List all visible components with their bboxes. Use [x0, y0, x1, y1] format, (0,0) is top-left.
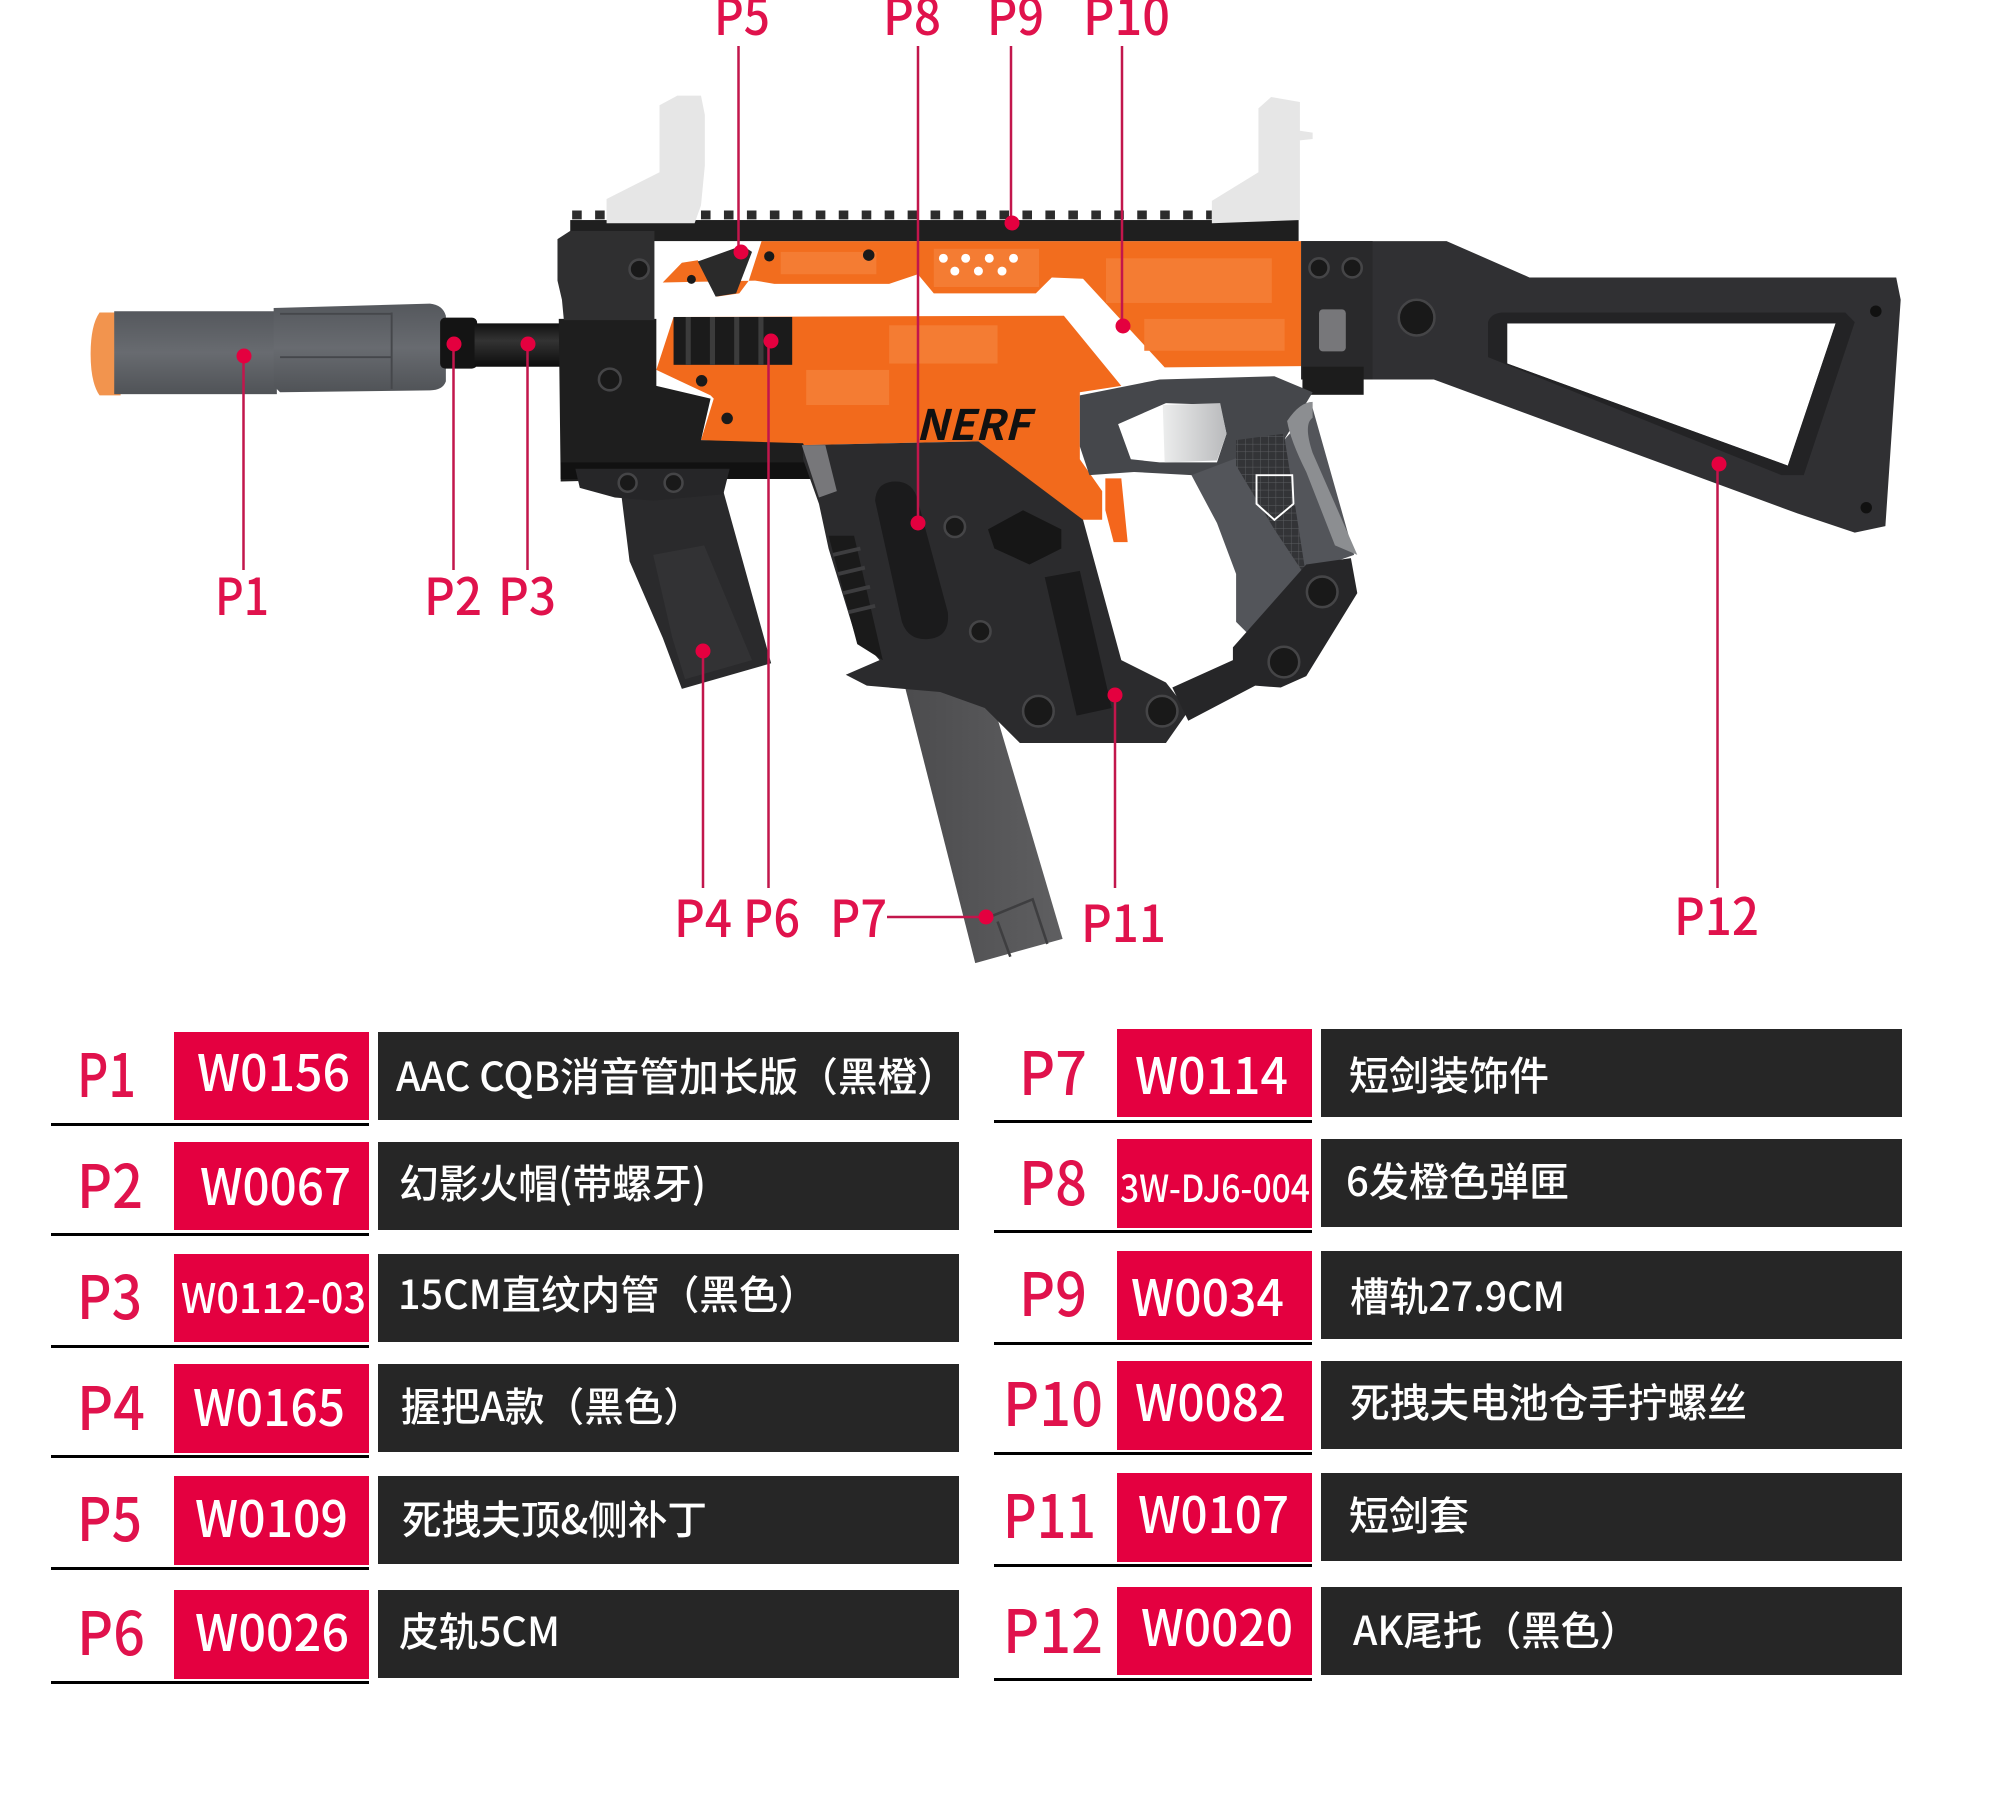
row P6: 皮轨5CM — [399, 1600, 560, 1658]
row P3 — [51, 1250, 959, 1348]
callout labels: P7 — [830, 878, 887, 952]
row P7: P7 — [1019, 1026, 1087, 1113]
leader line and dot: P7 — [887, 910, 994, 924]
lower blaster housing — [802, 441, 1188, 743]
row P9: W0034 — [1131, 1259, 1284, 1331]
callout labels: P11 — [1081, 883, 1166, 957]
row P11: P11 — [1003, 1469, 1096, 1556]
row P8: 6发橙色弹匣 — [1346, 1150, 1569, 1208]
receiver screw holes — [687, 249, 874, 424]
row P1: W0156 — [197, 1034, 350, 1106]
orange upper receiver — [663, 241, 1301, 367]
leader line and dot: P2 — [446, 336, 462, 570]
row P9 — [994, 1247, 1902, 1345]
row P1: AAC CQB消音管加长版（黑橙） — [396, 1045, 957, 1103]
callout labels: P12 — [1674, 876, 1759, 950]
row P1 — [51, 1028, 959, 1126]
callout labels: P3 — [498, 556, 556, 630]
row P10: P10 — [1003, 1357, 1103, 1444]
callout labels: P4 — [674, 878, 732, 952]
row P1: P1 — [77, 1028, 136, 1115]
row P10: W0082 — [1135, 1364, 1286, 1436]
front block — [557, 231, 816, 482]
callout labels: P2 — [424, 556, 482, 630]
row P12: P12 — [1003, 1584, 1103, 1671]
illustration: Kriss Vector style blaster — [91, 96, 1901, 963]
row P2: 幻影火帽(带螺牙) — [399, 1152, 706, 1210]
row P4: P4 — [77, 1361, 145, 1448]
row P2: P2 — [77, 1139, 143, 1226]
leader line and dot: P1 — [236, 348, 252, 570]
receiver vent holes — [939, 254, 1018, 276]
NERF logo: NERF — [916, 392, 1036, 453]
row P2 — [51, 1139, 959, 1236]
row P8 — [994, 1136, 1902, 1233]
row P5: P5 — [77, 1472, 142, 1559]
row P11: 短剑套 — [1349, 1484, 1469, 1542]
row P6 — [51, 1586, 959, 1684]
row P11: W0107 — [1138, 1476, 1289, 1548]
leader line and dot: P11 — [1108, 688, 1122, 888]
callout labels: P1 — [215, 556, 269, 630]
rear sight — [1212, 97, 1313, 223]
magazine — [901, 670, 1063, 963]
row P6: P6 — [77, 1586, 145, 1673]
top rail — [570, 215, 1299, 241]
leader line and dot: P10 — [1116, 46, 1130, 334]
callout labels: P6 — [743, 878, 800, 952]
row P7: 短剑装饰件 — [1349, 1044, 1549, 1102]
grip link arm — [1172, 558, 1357, 721]
row P3: W0112-03 — [181, 1265, 366, 1325]
row P2: W0067 — [200, 1148, 351, 1220]
row P7 — [994, 1026, 1902, 1123]
row P8: P8 — [1019, 1136, 1087, 1223]
receiver camo details — [781, 249, 1285, 405]
row P4 — [51, 1361, 959, 1458]
side picatinny rail — [674, 317, 792, 365]
suppressor — [91, 304, 446, 395]
parts table: right column — [994, 1026, 1902, 1681]
trigger guard and pistol grip — [1080, 376, 1357, 638]
leader line and dot: P6 — [764, 334, 778, 888]
row P5 — [51, 1472, 959, 1570]
row P10: 死拽夫电池仓手拧螺丝 — [1350, 1371, 1747, 1429]
row P10 — [994, 1357, 1902, 1455]
row P12: AK尾托（黑色） — [1353, 1599, 1639, 1657]
row P3: 15CM直纹内管（黑色） — [398, 1263, 818, 1321]
parts table: left column — [51, 1028, 959, 1684]
folding stock — [1301, 241, 1901, 533]
leader line and dot: P3 — [520, 336, 536, 570]
leader line and dot: P8 — [910, 46, 926, 530]
leader line and dot: P12 — [1712, 456, 1726, 888]
orange lower receiver — [656, 316, 1121, 520]
top and side patch — [698, 246, 752, 297]
orange charging lever — [1105, 478, 1128, 542]
row P9: P9 — [1019, 1247, 1087, 1334]
row P6: W0026 — [195, 1594, 349, 1666]
row P5: W0109 — [195, 1480, 348, 1552]
leader line and dot: P5 — [734, 46, 748, 260]
leader line and dot: P9 — [1004, 46, 1020, 230]
row P3: P3 — [77, 1250, 142, 1337]
row P4: 握把A款（黑色） — [401, 1375, 703, 1433]
row P11 — [994, 1469, 1902, 1567]
row P4: W0165 — [193, 1369, 345, 1441]
row P12 — [994, 1584, 1902, 1681]
row P8: 3W-DJ6-004 — [1120, 1159, 1310, 1213]
foregrip — [575, 469, 771, 689]
row P9: 槽轨27.9CM — [1350, 1265, 1565, 1323]
front sight — [607, 96, 705, 223]
leader line and dot: P4 — [696, 644, 710, 888]
flash hider and barrel — [440, 318, 564, 369]
row P12: W0020 — [1141, 1589, 1293, 1661]
row P7: W0114 — [1135, 1037, 1288, 1109]
callout labels — [215, 0, 1759, 957]
row P5: 死拽夫顶&侧补丁 — [402, 1488, 707, 1546]
